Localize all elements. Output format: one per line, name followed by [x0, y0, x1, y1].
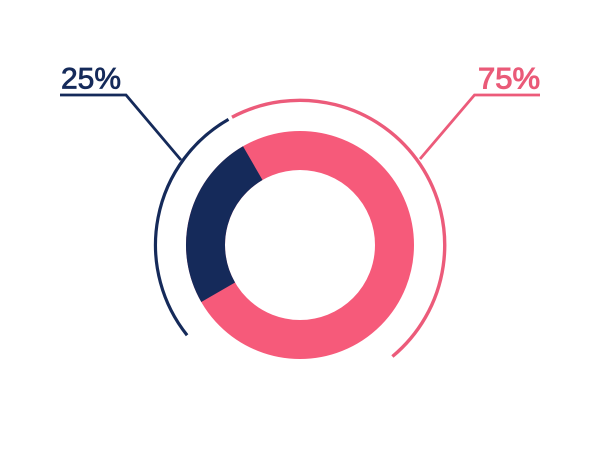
outer arc: 25% — [155, 119, 228, 335]
donut chart — [205, 150, 394, 340]
donut segment: 25% — [205, 163, 253, 292]
label: 75%: 75% — [478, 62, 540, 96]
donut segment: 75% — [206, 150, 394, 340]
leader line: 75% — [420, 95, 540, 159]
label: 25%: 25% — [61, 62, 121, 96]
leader line: 25% — [60, 95, 181, 160]
outer arc: 75% — [232, 100, 445, 356]
